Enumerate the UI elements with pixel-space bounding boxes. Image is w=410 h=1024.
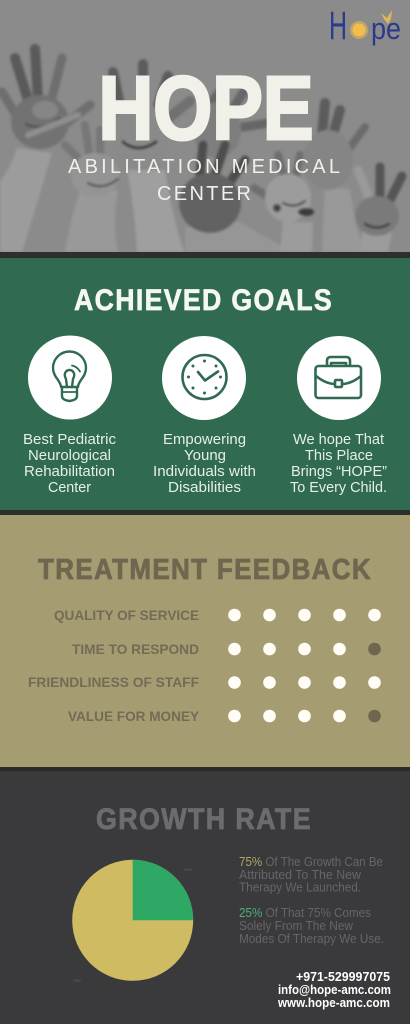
text: 75 percent note — [239, 854, 383, 894]
rating: time to respond: TIME TO RESPOND — [72, 641, 199, 657]
contact details: +971-529997075 — [296, 969, 390, 984]
goal: pediatric center — [23, 336, 116, 496]
text: goal one: Best Pediatric — [23, 431, 116, 448]
logo — [329, 4, 401, 48]
rating: quality of service — [54, 607, 381, 623]
pie chart: 25% — [184, 867, 192, 872]
text: goal two: Empowering — [163, 431, 246, 448]
contact details: info@hope-amc.com — [278, 982, 391, 997]
panel: growth rate — [0, 771, 410, 1024]
contact details: www.hope-amc.com — [277, 995, 390, 1010]
logo: pe — [371, 11, 401, 46]
divider band — [0, 510, 410, 515]
text: 75 percent note: Therapy We Launched. — [239, 880, 361, 894]
rating: quality of service: QUALITY OF SERVICE — [54, 607, 199, 623]
text: goal one — [23, 431, 116, 496]
goal: empowering individuals — [153, 336, 256, 496]
text: goal three: We hope That — [293, 431, 385, 448]
text: 25 percent note — [239, 905, 384, 946]
text: goal two: Young — [184, 447, 226, 464]
panel: treatment feedback — [0, 515, 410, 767]
text: goal two: Disabilities — [168, 479, 241, 496]
heading: growth rate: GROWTH RATE — [96, 803, 312, 836]
rating: value for money — [68, 708, 381, 724]
text: goal one: Rehabilitation — [24, 463, 115, 480]
divider band — [0, 252, 410, 258]
subtitle — [68, 156, 340, 205]
text: goal three — [290, 431, 387, 496]
text: 25 percent note: Modes Of Therapy We Use. — [239, 931, 384, 946]
heading: achieved goals: ACHIEVED GOALS — [74, 284, 333, 317]
icon: light bulb — [53, 352, 86, 401]
text: goal three: Brings “HOPE” — [291, 463, 387, 480]
rating: friendliness of staff: FRIENDLINESS OF STAFF — [28, 674, 199, 690]
subtitle: CENTER — [157, 183, 251, 205]
text: goal three: This Place — [305, 447, 373, 464]
text: 25 percent note: Solely From The New — [239, 918, 353, 933]
image: children's painted hands — [0, 49, 402, 252]
text: goal one: Center — [48, 479, 91, 496]
text: goal two — [153, 431, 256, 496]
panel: achieved goals — [0, 258, 410, 510]
contact details — [277, 969, 391, 1010]
text: goal one: Neurological — [28, 447, 111, 464]
goal: hope for every child — [290, 336, 387, 496]
rating: value for money: VALUE FOR MONEY — [68, 708, 200, 724]
text: goal three: To Every Child. — [290, 479, 387, 496]
subtitle: ABILITATION MEDICAL — [68, 156, 340, 178]
title: HOPE — [98, 59, 314, 159]
rating: time to respond — [72, 641, 381, 657]
rating: friendliness of staff — [28, 674, 381, 690]
panel: hero — [0, 0, 410, 252]
heading: treatment feedback: TREATMENT FEEDBACK — [38, 554, 372, 586]
pie chart — [72, 860, 193, 983]
pie chart: 75% — [73, 978, 81, 983]
logo: H — [329, 4, 347, 48]
icon: clock — [182, 355, 226, 399]
text: 75 percent note: Attributed To The New — [239, 867, 361, 882]
text: 75 percent note: 75% Of The Growth Can Be — [239, 854, 383, 869]
icon: briefcase — [316, 357, 361, 398]
divider band — [0, 767, 410, 771]
text: goal two: Individuals with — [153, 463, 256, 480]
text: 25 percent note: 25% Of That 75% Comes — [239, 905, 371, 920]
